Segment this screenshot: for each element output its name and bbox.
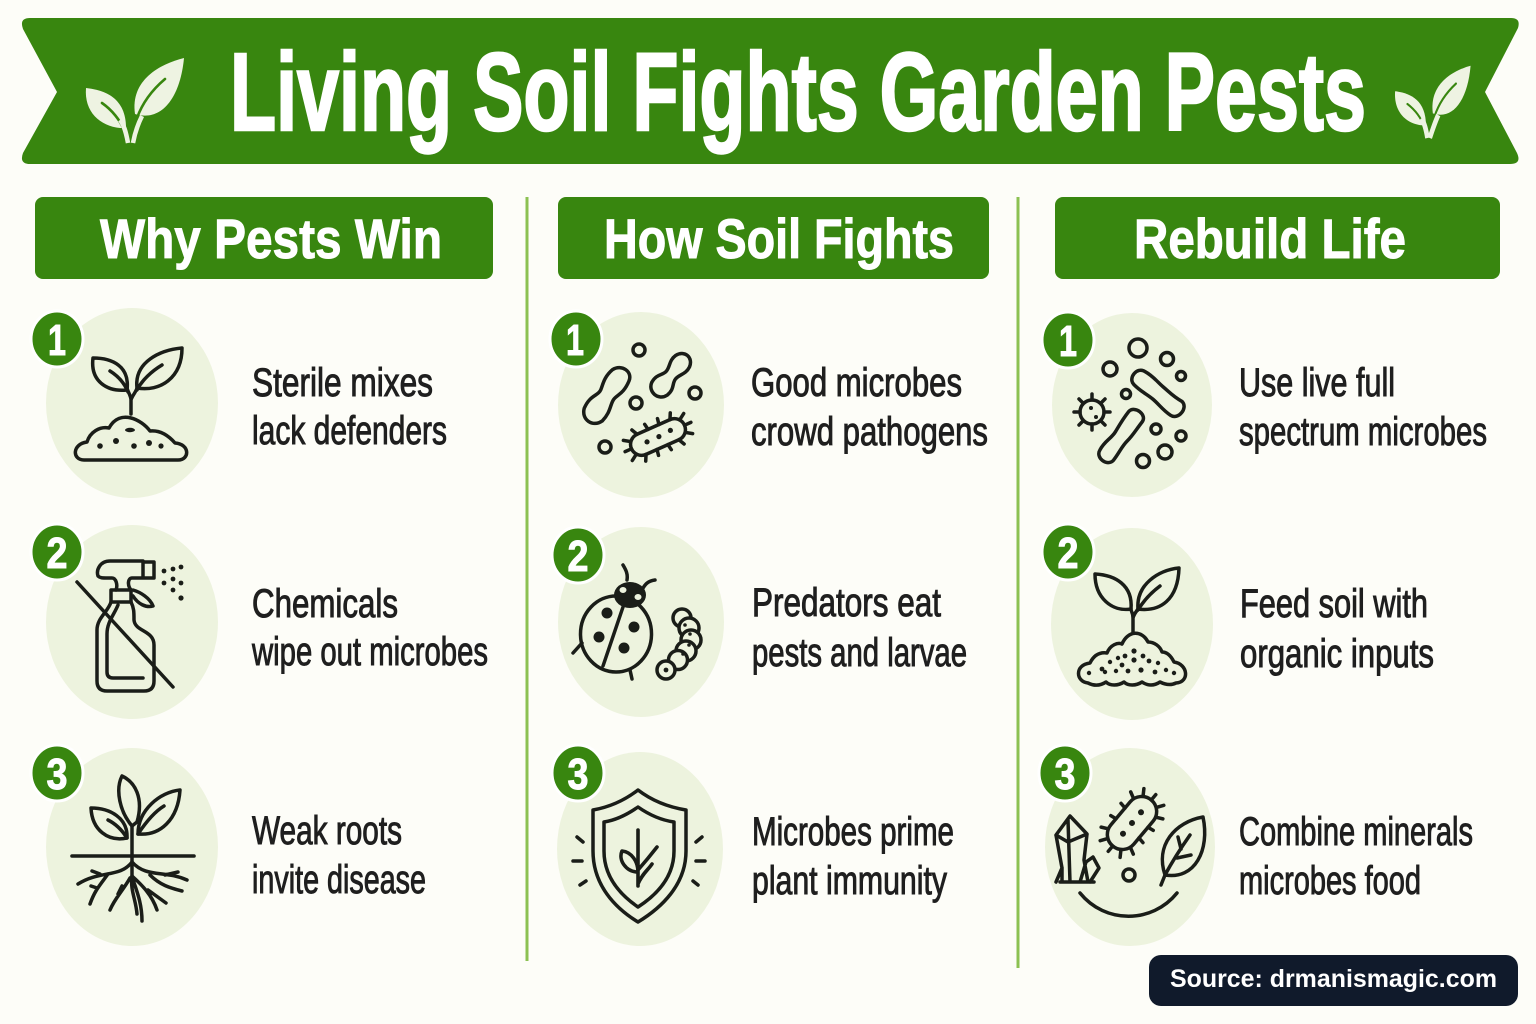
number badge 2: 2	[46, 529, 68, 578]
item: weak roots	[31, 745, 426, 946]
icon: crystals, microbe and leaf	[1056, 781, 1205, 916]
icon: right leaves	[1395, 66, 1471, 138]
icon: crossed spray bottle	[77, 561, 184, 691]
number badge 3	[552, 745, 604, 801]
heading: how soil fights: How Soil Fights	[604, 207, 954, 270]
heading: rebuild life: Rebuild Life	[1134, 207, 1406, 270]
number badge 1	[1042, 312, 1094, 368]
number badge 1: 1	[48, 316, 66, 365]
number badge 3: 3	[568, 750, 588, 799]
number badge 1: 1	[566, 316, 584, 365]
text: predators: pests and larvae	[752, 631, 967, 675]
icon: microbe mix	[1074, 339, 1187, 468]
text: weak roots: invite disease	[252, 858, 426, 902]
icon: left leaves	[86, 58, 184, 143]
number badge 2	[552, 527, 604, 583]
icon: shield with plant	[573, 790, 705, 922]
text: plant immunity: plant immunity	[752, 859, 947, 903]
item: organic inputs	[1042, 524, 1434, 720]
text: plant immunity: Microbes prime	[752, 810, 954, 854]
text: sterile mixes: lack defenders	[252, 409, 447, 453]
icon: plant with roots	[72, 776, 194, 921]
number badge 1: 1	[1059, 317, 1077, 366]
heading: how soil fights	[558, 197, 989, 279]
icon: sprout on rich soil	[1078, 568, 1186, 685]
number badge 1	[31, 311, 83, 367]
icon: sprout in soil	[75, 348, 187, 460]
text: minerals microbes food: microbes food	[1239, 859, 1421, 903]
number badge 1	[550, 311, 602, 367]
item: sterile mixes	[31, 308, 447, 498]
text: chemicals: wipe out microbes	[251, 630, 488, 674]
heading: why pests win	[35, 197, 493, 279]
text: weak roots: Weak roots	[252, 809, 402, 853]
number badge 3	[31, 745, 83, 801]
item: chemicals	[31, 524, 488, 719]
item: live microbes	[1042, 312, 1487, 497]
number badge 2	[1042, 524, 1094, 580]
heading: why pests win: Why Pests Win	[100, 207, 442, 270]
text: live microbes: Use live full	[1239, 361, 1395, 405]
text: good microbes: Good microbes	[751, 361, 962, 405]
title banner	[22, 18, 1519, 164]
source label	[1149, 955, 1518, 1006]
heading: rebuild life	[1055, 197, 1500, 279]
text: good microbes: crowd pathogens	[751, 410, 988, 454]
icon: ladybug and larva	[573, 565, 701, 679]
item: predators	[552, 527, 967, 717]
icon: bacteria	[579, 344, 701, 467]
number badge 3: 3	[46, 750, 68, 799]
text: predators: Predators eat	[752, 581, 941, 625]
text: organic inputs: Feed soil with	[1240, 582, 1428, 626]
number badge 2: 2	[1058, 529, 1078, 578]
source label: Source: drmanismagic.com	[1170, 965, 1497, 993]
number badge 3	[1039, 745, 1091, 801]
item: minerals microbes food	[1039, 745, 1473, 946]
number badge 3: 3	[1054, 750, 1076, 799]
panel: rebuild life	[1039, 197, 1500, 946]
number badge 2: 2	[568, 532, 588, 581]
text: sterile mixes: Sterile mixes	[252, 361, 433, 405]
item: plant immunity	[552, 745, 954, 946]
panel: why pests win	[31, 197, 493, 946]
text: chemicals: Chemicals	[252, 582, 398, 626]
panel: how soil fights	[550, 197, 989, 946]
item: good microbes	[550, 311, 988, 498]
text: organic inputs: organic inputs	[1240, 632, 1434, 676]
number badge 2	[31, 524, 83, 580]
